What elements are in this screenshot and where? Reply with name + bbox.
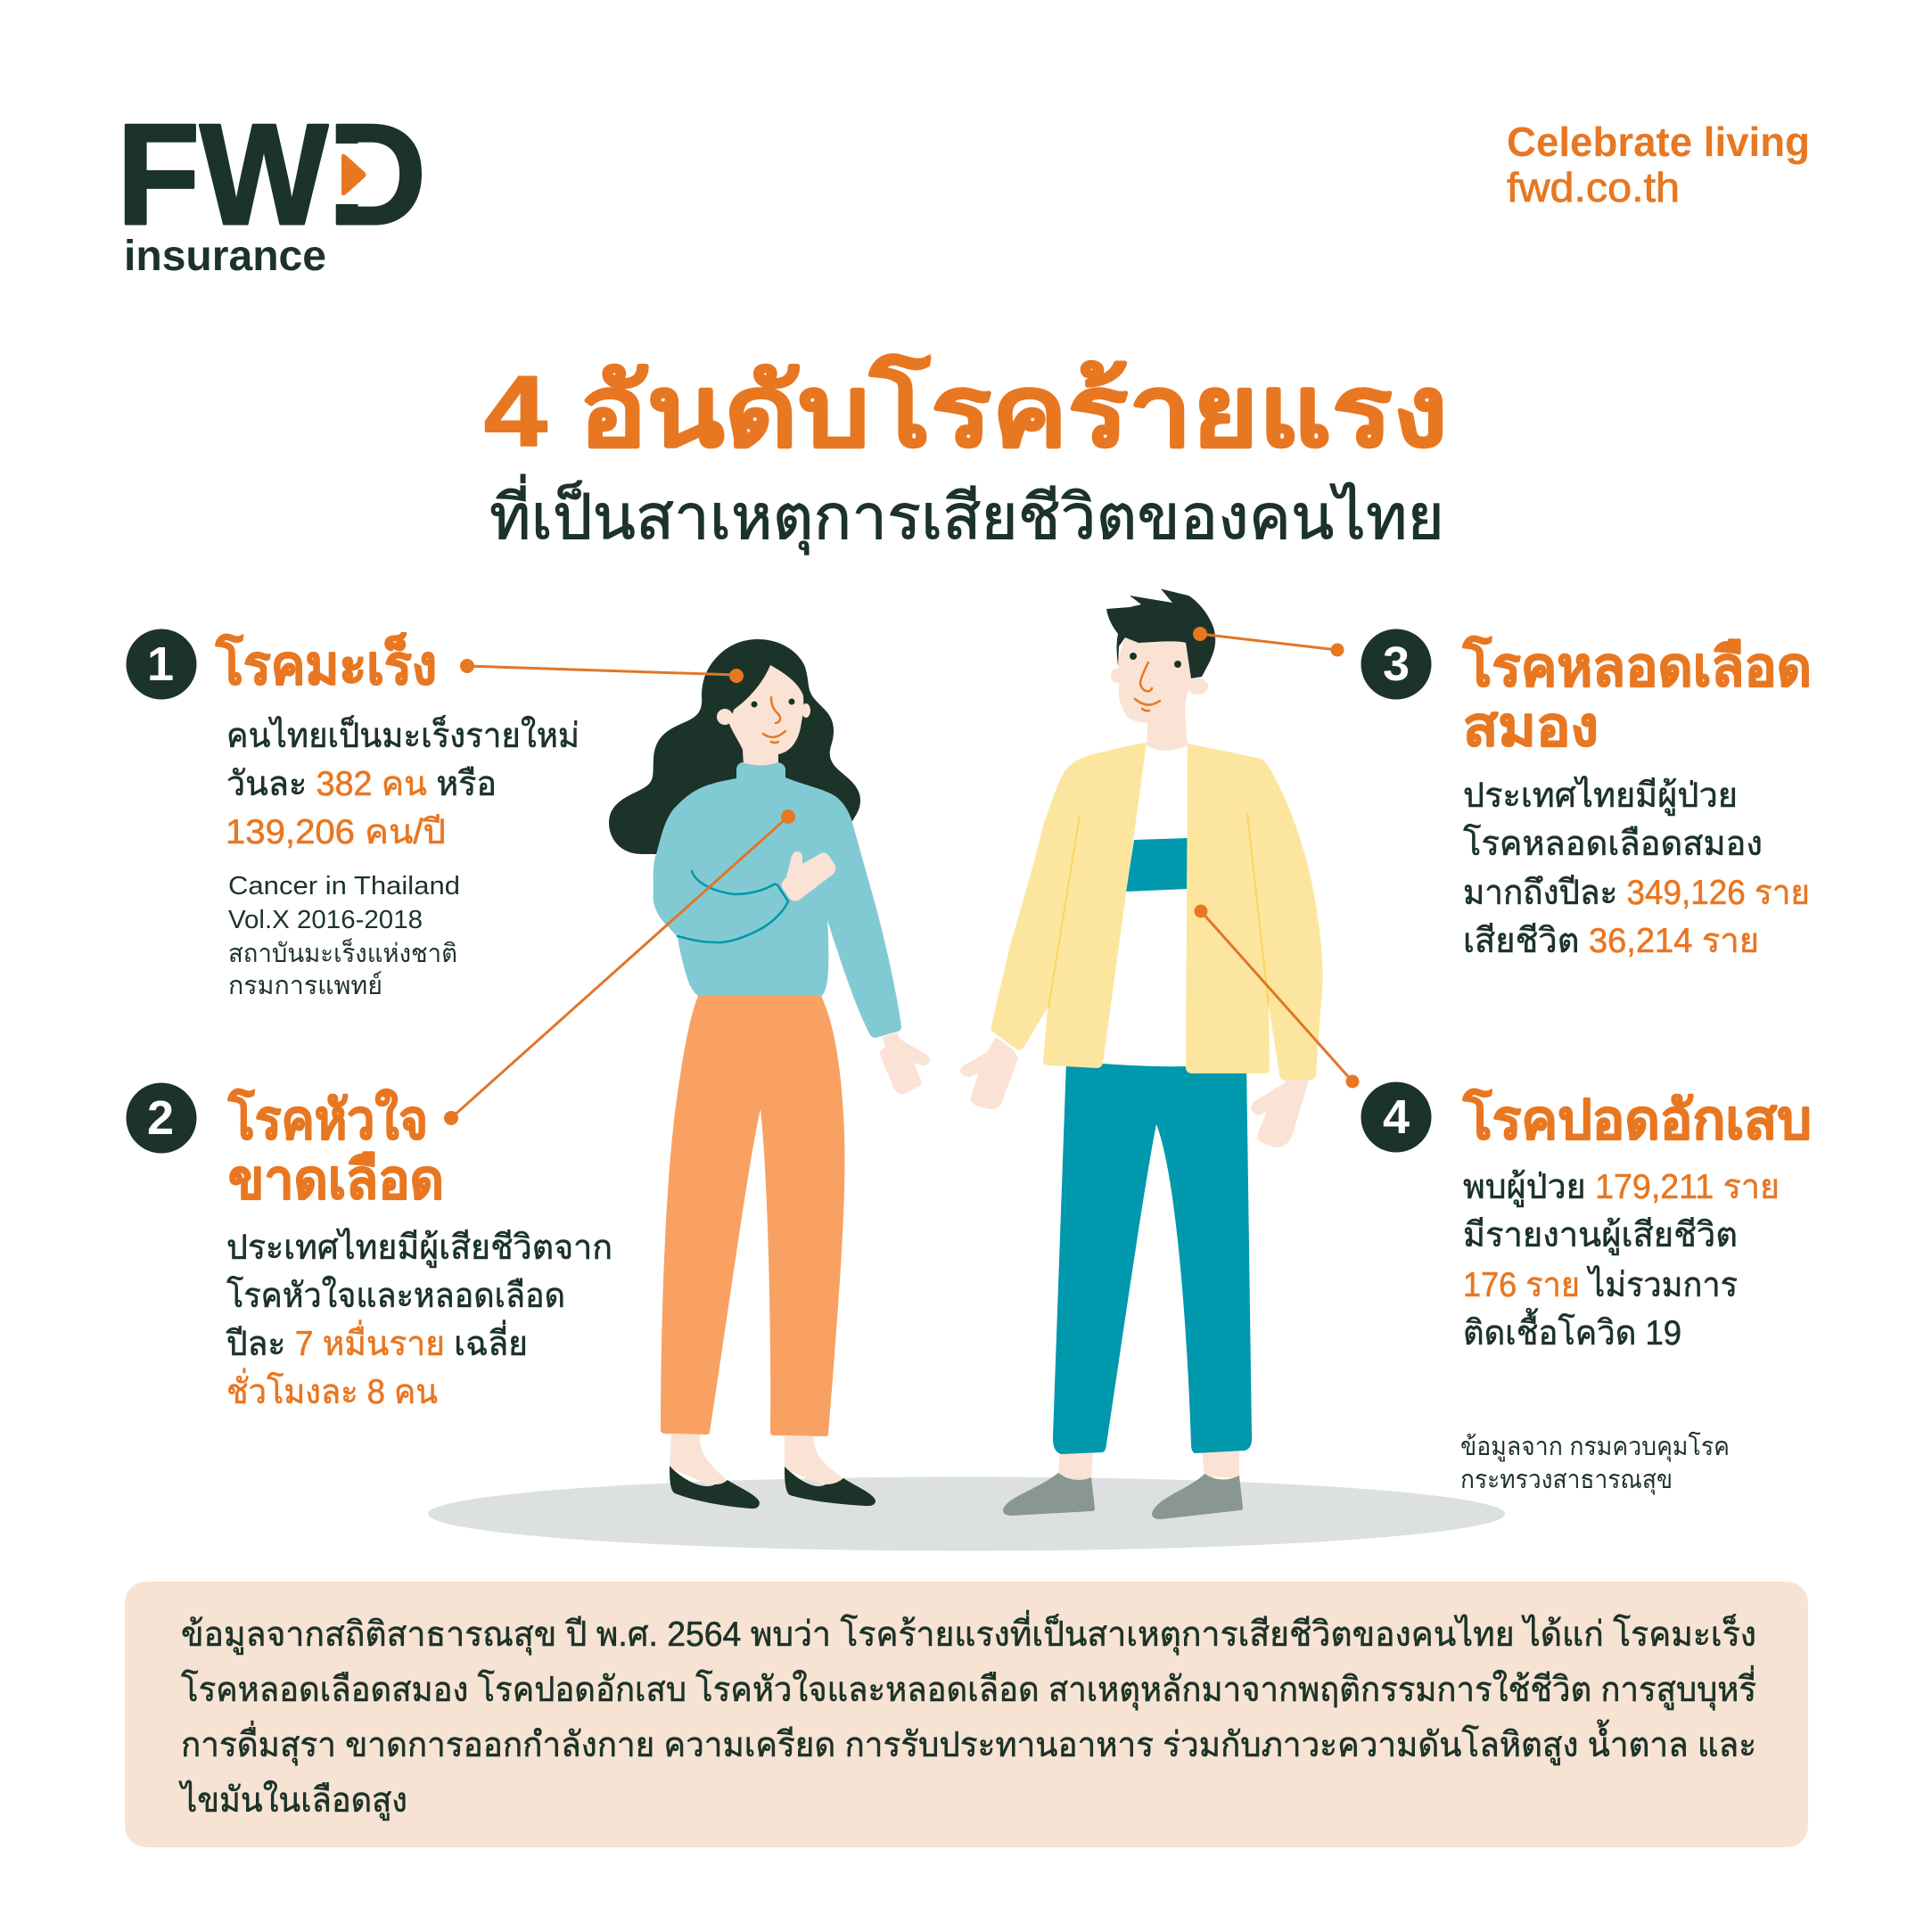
body 1: 139,206 คน/ปี (226, 813, 446, 851)
logo: FWD insurance: FWD (117, 95, 426, 255)
heading 2: ขาดเลือด (228, 1149, 444, 1210)
badge 3: 3 (1383, 637, 1410, 691)
heading 4: โรคปอดอักเสบ (1462, 1088, 1812, 1150)
source 1: Cancer in Thailand (228, 872, 460, 900)
woman hand on chest (782, 851, 835, 901)
summary text: ข้อมูลจากสถิติสาธารณสุข ปี พ.ศ. 2564 พบว่า โรคร้ายแรงที่เป็นสาเหตุการเสียชีวิตของคนไทย ได้แก่ โรคมะเร็ง (181, 1610, 1756, 1656)
woman hair (609, 639, 860, 854)
body 2: ปีละ 7 หมื่นราย เฉลี่ย (226, 1320, 528, 1363)
woman sweater (654, 762, 901, 1038)
section 3: stroke (1361, 629, 1812, 960)
body 1: คนไทยเป็นมะเร็งรายใหม่ (226, 714, 580, 755)
heading 2 (227, 1088, 444, 1210)
summary panel (125, 1582, 1808, 1847)
woman ankles (670, 1435, 844, 1487)
man ankles (1058, 1449, 1239, 1480)
body 3 (1463, 776, 1810, 960)
body 3: เสียชีวิต 36,214 ราย (1463, 922, 1759, 960)
illustration: man (960, 588, 1323, 1519)
heading 3: โรคหลอดเลือด (1462, 635, 1812, 697)
badge 1 (127, 629, 196, 699)
source 1: Vol.X 2016-2018 (228, 906, 423, 934)
woman face (729, 665, 803, 767)
man face (1118, 637, 1191, 751)
connector 1 (460, 659, 744, 683)
badge 1: 1 (147, 637, 174, 691)
man jacket (991, 743, 1147, 1068)
body 4 (1463, 1168, 1780, 1352)
body 2: โรคหัวใจและหลอดเลือด (226, 1276, 565, 1315)
body 3: มากถึงปีละ 349,126 ราย (1463, 874, 1810, 912)
subtitle: ที่เป็นสาเหตุการเสียชีวิตของคนไทย (489, 474, 1444, 555)
title: 4 อันดับโรคร้ายแรง (484, 354, 1448, 467)
source 1 (228, 872, 460, 1000)
woman arm lines (678, 871, 788, 942)
badge 3 (1361, 629, 1432, 699)
heading 1: โรคมะเร็ง (215, 633, 437, 695)
logo: FWD insurance: insurance (124, 233, 326, 280)
body 4: พบผู้ป่วย 179,211 ราย (1463, 1168, 1780, 1207)
badge 2: 2 (147, 1091, 174, 1145)
section 2: ischemic heart disease (127, 1082, 612, 1411)
summary text: การดื่มสุรา ขาดการออกกำลังกาย ความเครียด การรับประทานอาหาร ร่วมกับภาวะความดันโลหิตสูง น้ำตาล และ (181, 1719, 1756, 1766)
body 1: วันละ 382 คน หรือ (226, 765, 497, 803)
illustration: woman (609, 639, 930, 1509)
connector 2 (444, 810, 795, 1125)
source 4 (1460, 1431, 1730, 1495)
body 3: โรคหลอดเลือดสมอง (1463, 824, 1763, 863)
tagline: Celebrate living (1507, 119, 1810, 165)
connector 4 (1195, 904, 1359, 1088)
man shoes (1003, 1473, 1243, 1519)
heading 2: โรคหัวใจ (227, 1088, 428, 1150)
heading 3: สมอง (1463, 696, 1599, 757)
ground shadow (428, 1476, 1505, 1551)
woman shoes (670, 1466, 876, 1509)
tagline (1507, 119, 1810, 210)
man pants (1053, 1061, 1252, 1454)
man t-shirt (1083, 740, 1188, 1066)
man t-shirt stripe (1126, 838, 1188, 892)
body 1 (226, 714, 580, 851)
man hair (1106, 588, 1215, 678)
summary text: โรคหลอดเลือดสมอง โรคปอดอักเสบ โรคหัวใจและหลอดเลือด สาเหตุหลักมาจากพฤติกรรมการใช้ชีวิต การสูบบุหรี่ (181, 1665, 1756, 1711)
badge 2 (127, 1082, 196, 1154)
badge 4: 4 (1383, 1090, 1410, 1144)
heading 3 (1462, 635, 1812, 757)
source 1: กรมการแพทย์ (228, 971, 382, 1000)
woman lower hand (880, 1032, 930, 1094)
body 4: มีรายงานผู้เสียชีวิต (1463, 1216, 1738, 1255)
section 4: pneumonia (1361, 1082, 1812, 1495)
source 4: ข้อมูลจาก กรมควบคุมโรค (1460, 1431, 1730, 1462)
source 4: กระทรวงสาธารณสุข (1460, 1466, 1673, 1495)
summary text: ไขมันในเลือดสูง (178, 1780, 407, 1821)
man hands (960, 1037, 1311, 1147)
woman pants (661, 996, 844, 1436)
body 4: ติดเชื้อโควิด 19 (1463, 1308, 1681, 1352)
body 4: 176 ราย ไม่รวมการ (1463, 1265, 1738, 1304)
body 2: ประเทศไทยมีผู้เสียชีวิตจาก (226, 1228, 612, 1268)
summary text (178, 1610, 1756, 1821)
source 1: สถาบันมะเร็งแห่งชาติ (228, 937, 457, 968)
connector 3 (1193, 627, 1344, 656)
jacket seams (1048, 814, 1269, 1007)
badge 4 (1361, 1082, 1432, 1152)
body 2: ชั่วโมงละ 8 คน (226, 1368, 438, 1411)
body 2 (226, 1228, 612, 1411)
section 1: cancer (127, 629, 580, 1000)
tagline: fwd.co.th (1507, 164, 1680, 210)
body 3: ประเทศไทยมีผู้ป่วย (1463, 776, 1738, 816)
